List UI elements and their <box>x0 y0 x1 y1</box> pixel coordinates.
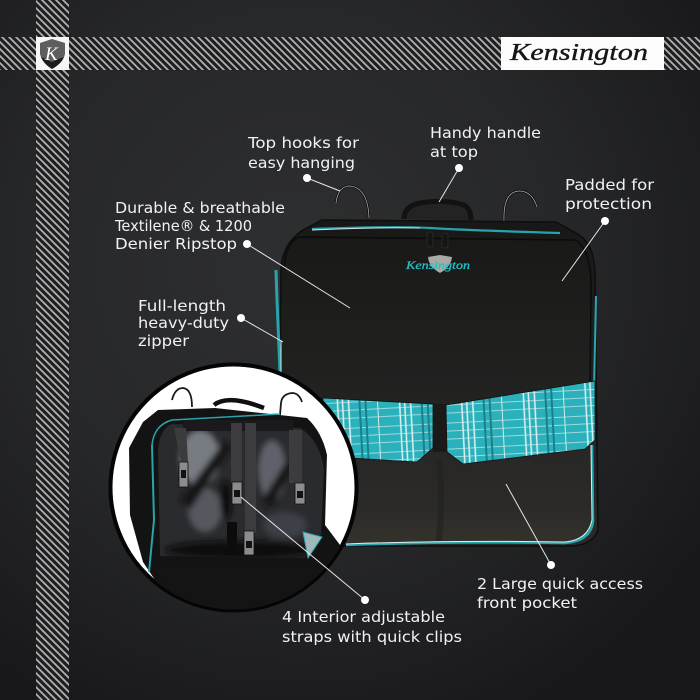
label: zipper: zipper <box>138 332 190 350</box>
label: pocket: front pocket <box>477 594 577 612</box>
side zipper right <box>594 296 596 390</box>
inset turquoise corner <box>303 532 322 558</box>
label: material: Durable & breathable <box>115 199 285 217</box>
label: handle: at top <box>430 143 478 161</box>
label: pocket <box>477 575 643 612</box>
label: top hooks: easy hanging <box>248 154 355 172</box>
callout dots <box>237 164 609 604</box>
label: material: Denier Ripstop <box>115 235 237 253</box>
label: handle: Handy handle <box>430 124 541 142</box>
label: padded: protection <box>565 195 652 213</box>
side zipper left <box>276 270 280 372</box>
label: material: Textilene® & 1200 <box>114 217 252 235</box>
label: straps: straps with quick clips <box>282 628 462 646</box>
label: material <box>114 199 285 253</box>
label: top hooks: Top hooks for <box>247 134 360 152</box>
label: top hooks <box>247 134 360 172</box>
lower pockets <box>320 395 595 543</box>
inset top bar <box>183 420 293 431</box>
label: zipper: heavy-duty <box>138 314 229 332</box>
inset handle <box>214 400 264 408</box>
inset straps <box>174 423 302 533</box>
brand logo: Kensington <box>501 37 664 70</box>
label: zipper <box>138 297 229 350</box>
right pocket flap <box>446 381 595 464</box>
embroidered logo: Kensington <box>405 258 470 272</box>
label: straps: 4 Interior adjustable <box>282 608 445 626</box>
label: padded: Padded for <box>565 176 655 194</box>
inset lining <box>158 424 324 558</box>
left pocket flap <box>320 398 433 462</box>
embroidered logo <box>405 255 470 273</box>
inset bag shell <box>129 408 340 586</box>
product: garment bag <box>276 186 598 546</box>
icon: shield logo: K <box>44 44 59 65</box>
vertical striped band <box>36 0 69 700</box>
bag body <box>280 220 598 546</box>
label: handle <box>430 124 541 161</box>
label: pocket: 2 Large quick access <box>477 575 643 593</box>
icon: shield logo <box>36 37 69 70</box>
brand logo: Kensington: Kensington <box>509 40 648 66</box>
inset slit <box>227 522 237 544</box>
handle <box>404 201 471 220</box>
hooks <box>336 186 537 221</box>
label: straps <box>282 608 462 646</box>
label: zipper: Full-length <box>138 297 226 315</box>
top zipper <box>312 227 560 233</box>
zipper pulls <box>427 232 448 248</box>
pocket trim <box>346 445 593 545</box>
label: padded <box>565 176 655 213</box>
panel seam <box>284 237 591 395</box>
inset circle: bag interior <box>110 364 356 620</box>
callout lines <box>241 168 605 600</box>
inset lid <box>155 545 345 620</box>
horizontal striped band <box>0 37 700 70</box>
inset hooks <box>172 388 302 415</box>
inset zipper <box>152 414 280 445</box>
inset buckles <box>179 462 305 555</box>
